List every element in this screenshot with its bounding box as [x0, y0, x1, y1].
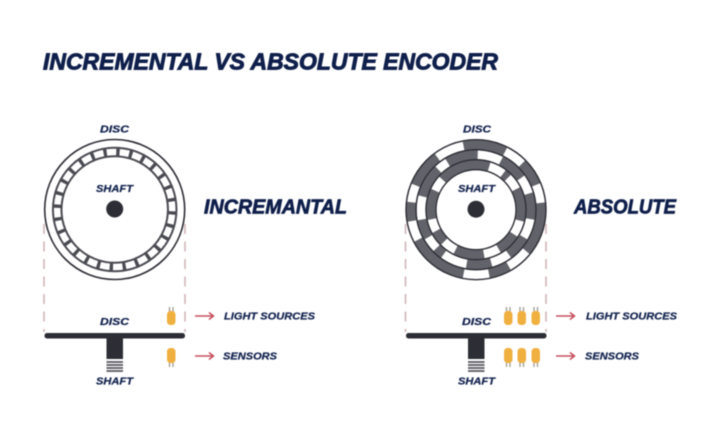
icons: sensors [504, 348, 540, 367]
panel: incremental encoder [44, 125, 347, 388]
panel: absolute encoder [384, 118, 677, 388]
label: side disc: DISC [100, 317, 130, 328]
label: side shaft: SHAFT [96, 377, 134, 388]
label: sensors: SENSORS [223, 352, 277, 363]
label: disc: DISC [100, 125, 130, 136]
side view: disc and shaft [44, 224, 185, 371]
label: side shaft: SHAFT [458, 377, 496, 388]
inner track windows [412, 146, 540, 273]
middle track windows [398, 132, 554, 287]
icon: sensor [167, 348, 176, 367]
label: sensors: SENSORS [585, 352, 639, 363]
label: light sources: LIGHT SOURCES [586, 312, 677, 323]
label: disc: DISC [463, 125, 492, 136]
arrow: sensors [556, 352, 574, 360]
outer track windows [384, 118, 568, 301]
label: light sources: LIGHT SOURCES [224, 312, 315, 323]
heading: absolute: ABSOLUTE [573, 196, 677, 218]
side view: disc and shaft [406, 224, 546, 371]
absolute disc diagram [384, 118, 568, 301]
label: side disc: DISC [462, 317, 492, 328]
icons: light sources [504, 307, 540, 325]
label: shaft: SHAFT [458, 184, 496, 195]
incremental disc diagram [45, 140, 185, 280]
icon: light source [167, 307, 176, 325]
arrow: light sources [556, 312, 574, 320]
title: INCREMENTAL VS ABSOLUTE ENCODER [43, 49, 498, 75]
arrow: light sources [195, 312, 214, 320]
heading: incremantal: INCREMANTAL [204, 196, 347, 218]
label: shaft: SHAFT [96, 184, 134, 195]
arrow: sensors [195, 352, 214, 360]
